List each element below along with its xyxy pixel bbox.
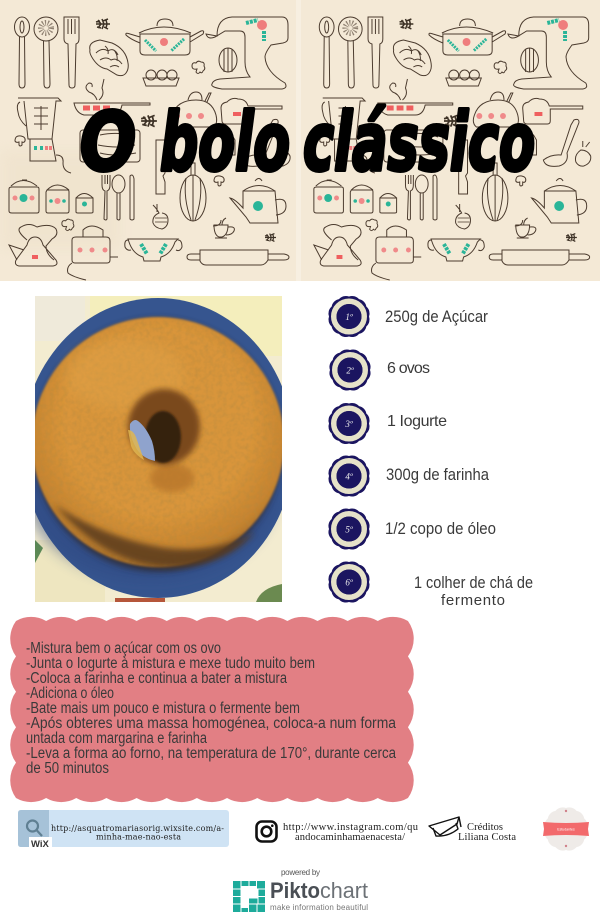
badge: ribbon seal bbox=[543, 807, 589, 851]
ingredient 3: 1 Iogurte bbox=[387, 413, 447, 430]
ingredient 5 bbox=[328, 508, 496, 550]
ingredient 2: 6 ovos bbox=[387, 360, 430, 377]
instagram link text: http://www.instagram.com/qu bbox=[283, 822, 419, 833]
piktochart logo: Pikto bbox=[270, 878, 320, 903]
preparation text: -Mistura bem o açúcar com os ovo bbox=[26, 640, 221, 657]
preparation text: -Após obteres uma massa homogénea, coloca-a num forma bbox=[26, 715, 396, 732]
website link box bbox=[18, 810, 229, 850]
title: bolo bbox=[160, 96, 290, 189]
ingredient 4 bbox=[328, 455, 489, 497]
ingredient 2: 2º bbox=[346, 366, 354, 376]
kitchen pattern left tile bbox=[9, 17, 290, 280]
preparation text: -Adiciona o óleo bbox=[26, 685, 114, 702]
preparation text: -Coloca a farinha e continua a bater a mistura bbox=[26, 670, 287, 687]
panel: preparation steps bbox=[10, 617, 414, 802]
title: O bbox=[80, 96, 136, 189]
ingredient 3 bbox=[328, 403, 447, 444]
piktochart logo: make information beautiful bbox=[270, 903, 368, 912]
ingredient 1: 1º bbox=[345, 312, 353, 322]
preparation text: -Bate mais um pouco e mistura o fermente bem bbox=[26, 700, 300, 717]
piktochart logo: chart bbox=[320, 878, 368, 903]
kitchen pattern right tile bbox=[314, 17, 591, 280]
title bbox=[80, 96, 535, 189]
header: kitchen pattern banner bbox=[0, 0, 600, 281]
ingredient 6: 6º bbox=[345, 578, 353, 588]
piktochart logo bbox=[233, 868, 368, 912]
ingredient 3: 3º bbox=[344, 419, 353, 429]
icon: magnifier bbox=[27, 820, 42, 836]
preparation text: -Leva a forma ao forno, na temperatura de 170°, durante cerca bbox=[26, 745, 396, 762]
credits: Créditos bbox=[467, 822, 503, 833]
instagram link text: andocaminhamaenacesta/ bbox=[295, 832, 405, 843]
logo mark bbox=[233, 881, 265, 912]
preparation text: untada com margarina e farinha bbox=[26, 730, 207, 747]
instagram link text bbox=[283, 822, 419, 843]
piktochart logo: powered by bbox=[281, 868, 320, 877]
ingredient 6: 1 colher de chá de bbox=[414, 573, 533, 592]
preparation text bbox=[26, 640, 396, 777]
preparation text: de 50 minutos bbox=[26, 760, 109, 777]
ingredient 6: fermento bbox=[441, 592, 505, 609]
credits: Liliana Costa bbox=[458, 832, 516, 843]
icon: instagram bbox=[256, 822, 276, 842]
ingredient 2 bbox=[329, 349, 430, 391]
ingredient 1 bbox=[328, 296, 488, 337]
website link box: minha-mae-nao-esta bbox=[96, 832, 181, 842]
icon: graduation cap bbox=[429, 817, 461, 836]
ingredient 5: 1/2 copo de óleo bbox=[385, 519, 496, 538]
website link box: http://asquatromariasorig.wixsite.com/a- bbox=[51, 824, 224, 833]
ingredient 1: 250g de Açúcar bbox=[385, 307, 488, 326]
badge: ribbon seal: Estudantes bbox=[557, 828, 575, 832]
website link box: WiX bbox=[31, 839, 50, 850]
preparation text: -Junta o Iogurte à mistura e mexe tudo muito bem bbox=[26, 655, 315, 672]
cake photo bbox=[22, 296, 294, 602]
ingredient 5: 5º bbox=[345, 524, 353, 534]
ingredient 4: 4º bbox=[345, 472, 353, 482]
ingredient 4: 300g de farinha bbox=[386, 465, 489, 484]
credits bbox=[458, 822, 516, 843]
ingredient 6 bbox=[328, 561, 533, 609]
